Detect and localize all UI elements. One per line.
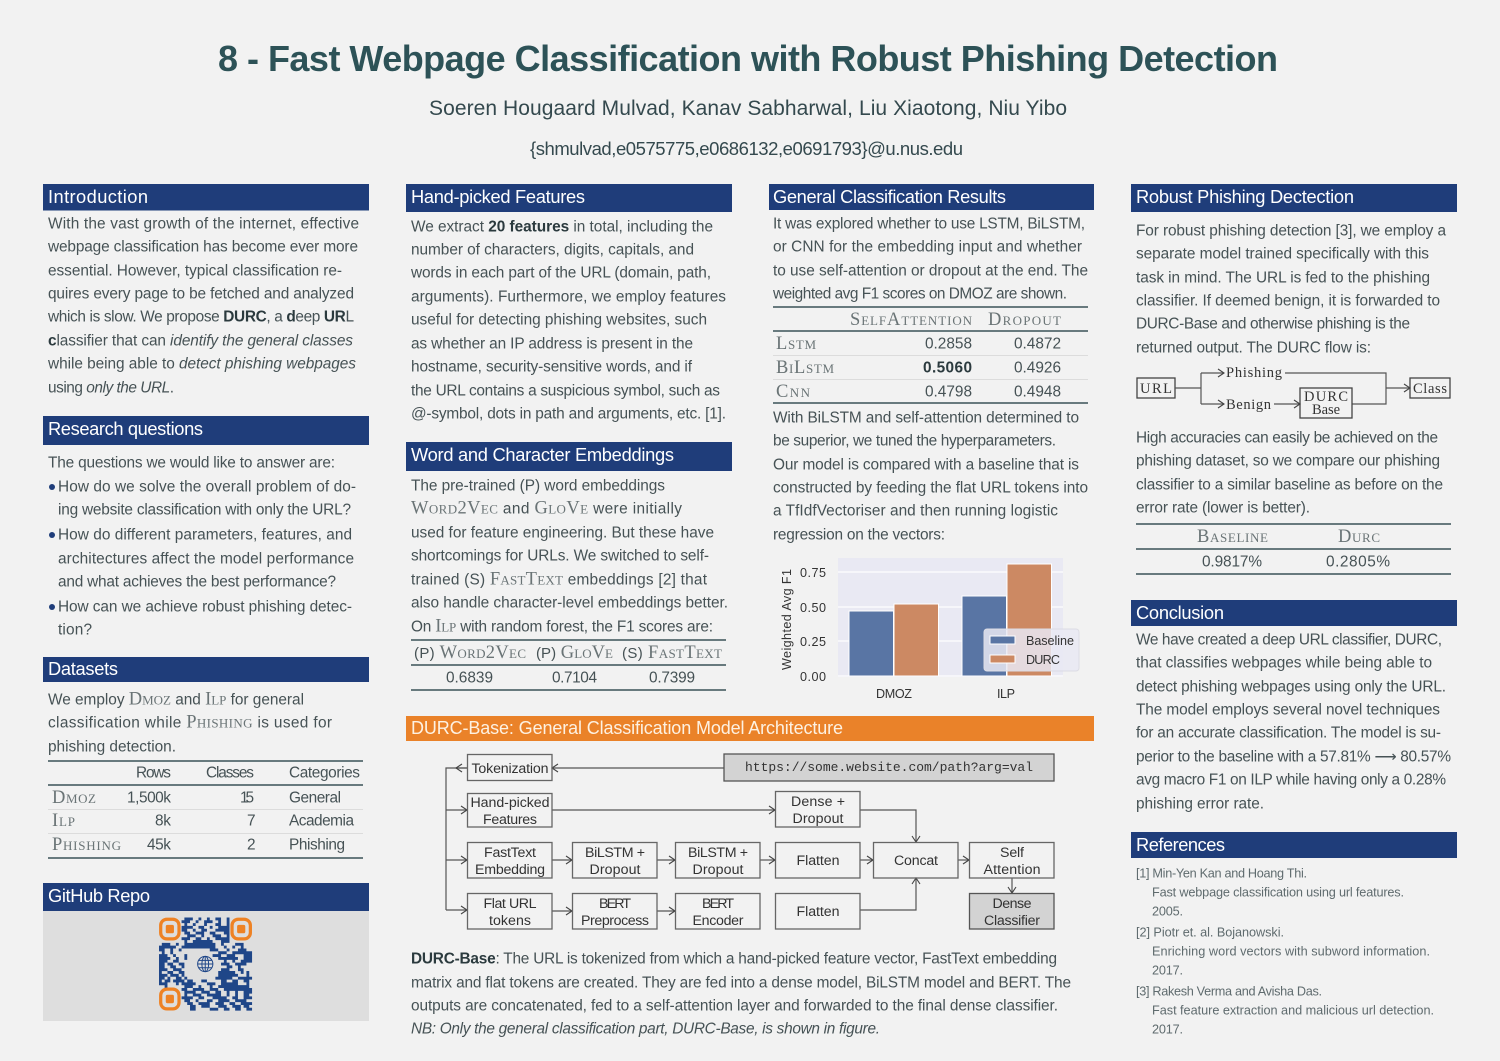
flow diagram: durc flow: Benign xyxy=(1226,397,1272,413)
text: features body xyxy=(410,218,726,422)
text: results intro: It was explored whether to use LSTM, BiLSTM, xyxy=(773,215,1085,232)
node: flatten 1: Flatten xyxy=(796,853,840,869)
heading: hand-picked features: Hand-picked Features xyxy=(411,186,585,207)
node: concat: Concat xyxy=(894,853,938,869)
text: results intro xyxy=(772,215,1088,302)
text: research questions list: and what achieves the best performance? xyxy=(58,573,336,590)
text: introduction body: webpage classification has become ever more xyxy=(47,238,358,255)
heading: general classification results xyxy=(769,184,1094,210)
table: model comparison: 0.4948 xyxy=(1014,383,1061,400)
heading: robust phishing detection xyxy=(1131,184,1457,212)
table: model comparison: 0.5060 xyxy=(923,359,972,376)
text: features body: number of characters, digits, capitals, and xyxy=(411,241,694,258)
node: url input xyxy=(724,754,1054,781)
bar chart: weighted avg F1: DMOZ xyxy=(876,687,912,701)
text: embeddings body: On Ilp with random forest, the F1 scores are: xyxy=(411,616,713,636)
node: tokenization: Tokenization xyxy=(472,761,548,777)
panel: references xyxy=(1131,832,1457,1036)
table: datasets: 2 xyxy=(247,836,256,853)
heading: model architecture xyxy=(406,716,1094,741)
node: bert encoder xyxy=(676,894,760,929)
panel: hand-picked features xyxy=(406,184,732,422)
text: conclusion body: phishing error rate. xyxy=(1136,795,1264,812)
legend xyxy=(984,629,1079,671)
text: results intro: to use self-attention or dropout at the end. The xyxy=(773,262,1088,279)
node: flat url tokens xyxy=(468,894,552,929)
text: conclusion body xyxy=(1136,631,1451,812)
node: hand-picked features: Features xyxy=(483,812,537,828)
bar chart: weighted avg F1: 0.25 xyxy=(800,635,826,649)
node: fasttext embedding: Embedding xyxy=(475,862,545,878)
heading: conclusion xyxy=(1131,600,1457,626)
bar chart: weighted avg F1: 0.75 xyxy=(800,566,826,580)
table: embedding F1 scores: (P) GloVe xyxy=(536,643,613,663)
node: bilstm 2: BiLSTM + xyxy=(688,845,748,861)
text: research questions list: How do we solve the overall problem of do- xyxy=(58,478,356,495)
text: features body: the URL contains a suspicious symbol, such as xyxy=(411,382,720,399)
heading: datasets xyxy=(43,657,369,682)
text: embeddings body: The pre-trained (P) word embeddings xyxy=(411,477,665,494)
table: model comparison: 0.2858 xyxy=(925,335,972,352)
text: introduction body: which is slow. We propose DURC, a deep URL xyxy=(47,308,354,325)
table: embedding F1 scores: 0.6839 xyxy=(446,669,493,686)
panel: general classification results xyxy=(769,184,1094,701)
text: research questions list: The questions we would like to answer are: xyxy=(48,454,335,471)
panel: github repo xyxy=(43,883,369,1021)
text: conclusion body: perior to the baseline with a 57.81% ⟶ 80.57% xyxy=(1136,748,1451,765)
text: research questions list: How do different parameters, features, and xyxy=(58,526,352,543)
node: dense classifier: Dense xyxy=(992,896,1032,912)
text: features body: useful for detecting phishing websites, such xyxy=(411,311,707,328)
bar chart: weighted avg F1: Weighted Avg F1 xyxy=(780,569,794,670)
node: dense dropout: Dense + xyxy=(791,794,845,810)
text: results baseline: With BiLSTM and self-attention determined to xyxy=(773,409,1079,426)
table: datasets xyxy=(48,761,363,858)
emails: {shmulvad,e0575775,e0686132,e0691793}@u.nus.edu xyxy=(530,138,963,159)
text: results intro: or CNN for the embedding input and whether xyxy=(773,238,1082,255)
table: datasets: Dmoz xyxy=(52,788,96,808)
panel: word and character embeddings xyxy=(406,442,732,690)
text: reference list xyxy=(1136,866,1434,1036)
heading: references: References xyxy=(1136,834,1225,855)
panel: datasets xyxy=(43,657,369,858)
text: phishing intro: task in mind. The URL is fed to the phishing xyxy=(1136,269,1430,286)
node: flatten 1 xyxy=(776,842,860,878)
text: introduction body: using only the URL. xyxy=(48,379,174,396)
legend: Baseline xyxy=(1026,634,1074,648)
panel: model architecture xyxy=(406,716,1094,1037)
table: datasets: 7 xyxy=(247,812,256,829)
panel: research questions xyxy=(43,416,369,638)
heading: references xyxy=(1131,832,1457,858)
text: results baseline: constructed by feeding the flat URL tokens into xyxy=(773,479,1088,496)
text: phishing results: error rate (lower is better). xyxy=(1136,499,1310,516)
heading: github repo: GitHub Repo xyxy=(48,885,150,906)
text: features body: as whether an IP address is present in the xyxy=(411,335,693,352)
text: architecture caption: outputs are concatenated, fed to a self-attention layer and forwarded to the final dense classifier. xyxy=(411,997,1058,1014)
text: phishing results: phishing dataset, so we compare our phishing xyxy=(1136,452,1440,469)
text: features body: arguments). Furthermore, we employ features xyxy=(411,288,726,305)
text: embeddings body: Word2Vec and GloVe were initially xyxy=(411,498,682,518)
node: bilstm 2 xyxy=(676,842,760,878)
table: datasets: Rows xyxy=(136,764,171,781)
node: bert preprocess xyxy=(572,894,657,929)
bar chart: weighted avg F1: 0.00 xyxy=(800,670,826,684)
table: embedding F1 scores: (S) FastText xyxy=(622,643,722,663)
table: datasets: 15 xyxy=(240,789,254,806)
node: bert encoder: BERT xyxy=(702,896,734,912)
text: results baseline: be superior, we tuned the hyperparameters. xyxy=(773,432,1056,449)
table: model comparison: Lstm xyxy=(776,334,816,354)
bar chart: weighted avg F1 xyxy=(780,558,1079,701)
text: conclusion body: for an accurate classification. The model is su- xyxy=(1136,724,1441,741)
text: conclusion body: We have created a deep URL classifier, DURC, xyxy=(1136,631,1442,648)
text: architecture caption: NB: Only the general classification part, DURC-Base, is shown in figure. xyxy=(411,1020,880,1037)
table: datasets: Categories xyxy=(289,764,360,781)
table: model comparison: 0.4926 xyxy=(1014,359,1061,376)
text: features body: @-symbol, dots in path and arguments, etc. [1]. xyxy=(411,405,726,422)
text: architecture caption: matrix and flat tokens are created. They are fed into a dense model, BiLSTM model and BERT. The xyxy=(411,974,1071,991)
legend: DURC xyxy=(1026,653,1060,667)
heading: introduction xyxy=(43,184,369,210)
text: datasets body xyxy=(48,689,332,755)
panel: robust phishing detection xyxy=(1131,184,1457,574)
text: introduction body: while being able to detect phishing webpages xyxy=(47,355,356,372)
text: reference list: Fast webpage classification using url features. xyxy=(1152,886,1404,900)
text: results baseline: a TfIdfVectoriser and then running logistic xyxy=(773,502,1058,519)
panel background: qr xyxy=(43,911,369,1021)
node: dense classifier: Classifier xyxy=(984,913,1040,929)
heading: robust phishing detection: Robust Phishing Dectection xyxy=(1136,186,1354,207)
text: introduction body: essential. However, typical classification re- xyxy=(48,262,342,279)
table: datasets: 45k xyxy=(147,836,171,853)
node: bilstm 1: Dropout xyxy=(590,862,641,878)
flow diagram: durc flow xyxy=(1137,365,1450,418)
text: reference list: [3] Rakesh Verma and Avisha Das. xyxy=(1136,984,1322,998)
text: research questions list: ing website classification with only the URL? xyxy=(58,501,351,518)
table: model comparison: 0.4798 xyxy=(925,383,972,400)
table: phishing error xyxy=(1136,524,1451,574)
text: reference list: Enriching word vectors with subword information. xyxy=(1152,944,1430,958)
table: datasets: Phishing xyxy=(52,835,121,855)
text: embeddings body: trained (S) FastText embeddings [2] that xyxy=(411,569,708,589)
table: model comparison: 0.4872 xyxy=(1014,335,1061,352)
table: datasets: Phishing xyxy=(289,836,345,853)
node: fasttext embedding xyxy=(468,842,552,878)
heading: research questions: Research questions xyxy=(48,418,203,439)
table: phishing error: 0.2805% xyxy=(1326,553,1390,570)
table: datasets: 1,500k xyxy=(127,789,171,806)
text: results baseline: Our model is compared with a baseline that is xyxy=(773,456,1079,473)
text: embeddings body: also handle character-level embeddings better. xyxy=(411,594,728,611)
text: research questions list: tion? xyxy=(58,621,92,638)
flow diagram: durc flow: Base xyxy=(1312,402,1340,418)
text: reference list: 2017. xyxy=(1152,964,1183,978)
bar chart: weighted avg F1: ILP xyxy=(997,687,1015,701)
text: datasets body: We employ Dmoz and Ilp for general xyxy=(48,689,304,709)
text: datasets body: phishing detection. xyxy=(48,738,176,755)
node: self attention: Self xyxy=(1000,845,1024,861)
table: model comparison: SelfAttention xyxy=(850,310,973,330)
text: results baseline xyxy=(773,409,1088,543)
heading: conclusion: Conclusion xyxy=(1136,602,1224,623)
flow diagram: durc flow: Class xyxy=(1413,381,1447,397)
text: research questions list: How can we achieve robust phishing detec- xyxy=(58,598,352,615)
text: phishing intro: DURC-Base and otherwise phishing is the xyxy=(1136,315,1410,332)
node: bert preprocess: Preprocess xyxy=(581,913,649,929)
table: embedding F1 scores: 0.7104 xyxy=(552,669,597,686)
text: results intro: weighted avg F1 scores on DMOZ are shown. xyxy=(772,285,1067,302)
heading: model architecture: DURC-Base: General Classification Model Architecture xyxy=(411,718,843,738)
text: reference list: 2017. xyxy=(1152,1022,1183,1036)
icon: qr code xyxy=(159,919,252,1009)
text: conclusion body: The model employs several novel techniques xyxy=(1136,701,1440,718)
node: tokenization xyxy=(468,754,552,780)
text: conclusion body: avg macro F1 on ILP while having only a 0.28% xyxy=(1136,771,1446,788)
text: architecture caption xyxy=(411,950,1071,1037)
authors: Soeren Hougaard Mulvad, Kanav Sabharwal, Liu Xiaotong, Niu Yibo xyxy=(429,97,1067,120)
panel: introduction xyxy=(43,184,369,396)
flow diagram: durc flow: URL xyxy=(1140,381,1172,397)
text: phishing results: High accuracies can easily be achieved on the xyxy=(1136,429,1438,446)
text: phishing intro: returned output. The DURC flow is: xyxy=(1136,339,1371,356)
table: phishing error: 0.9817% xyxy=(1202,553,1262,570)
node: dense dropout: Dropout xyxy=(792,811,844,827)
node: dense dropout xyxy=(776,792,860,827)
node: bert encoder: Encoder xyxy=(692,913,744,929)
text: phishing intro: classifier. If deemed benign, it is forwarded to xyxy=(1136,292,1440,309)
text: embeddings body xyxy=(411,477,728,636)
node: flatten 2 xyxy=(776,894,860,929)
flow diagram: durc flow: DURC xyxy=(1304,389,1348,405)
text: introduction body: With the vast growth of the internet, effective xyxy=(48,215,359,232)
flow diagram: durc flow: Phishing xyxy=(1226,365,1282,381)
text: features body: words in each part of the URL (domain, path, xyxy=(410,264,711,281)
title: 8 - Fast Webpage Classification with Robust Phishing Detection xyxy=(218,38,1278,79)
node: hand-picked features xyxy=(468,794,552,828)
table: embedding F1 scores: 0.7399 xyxy=(649,669,695,686)
heading: datasets: Datasets xyxy=(48,658,118,679)
text: research questions list xyxy=(48,454,356,638)
text: features body: hostname, security-sensitive words, and if xyxy=(411,358,693,375)
node: url input: https://some.website.com/path?arg=val xyxy=(745,760,1033,775)
node: fasttext embedding: FastText xyxy=(484,845,536,861)
table: datasets: Ilp xyxy=(52,811,75,831)
text: architecture caption: DURC-Base: The URL is tokenized from which a hand-picked feature vector, FastText embedding xyxy=(411,950,1057,967)
heading: hand-picked features xyxy=(406,184,732,212)
text: conclusion body: detect phishing webpages using only the URL. xyxy=(1136,678,1446,695)
node: bilstm 1 xyxy=(572,842,657,878)
heading: embeddings: Word and Character Embeddings xyxy=(411,444,674,465)
heading: introduction: Introduction xyxy=(48,186,148,207)
table: datasets: General xyxy=(289,789,341,806)
node: flatten 2: Flatten xyxy=(796,904,840,920)
text: reference list: Fast feature extraction and malicious url detection. xyxy=(1152,1004,1434,1018)
table: datasets: 8k xyxy=(155,812,171,829)
text: introduction body: quires every page to be fetched and analyzed xyxy=(48,285,354,302)
text: results baseline: regression on the vectors: xyxy=(773,526,945,543)
node: bilstm 1: BiLSTM + xyxy=(585,845,645,861)
text: conclusion body: that classifies webpages while being able to xyxy=(1136,654,1432,671)
node: flat url tokens: tokens xyxy=(489,913,531,929)
text: phishing intro: separate model trained specifically with this xyxy=(1136,245,1429,262)
node: self attention: Attention xyxy=(984,862,1040,878)
heading: embeddings xyxy=(406,442,732,471)
text: phishing results: classifier to a similar baseline as before on the xyxy=(1136,476,1443,493)
table: model comparison: Cnn xyxy=(776,382,811,402)
text: introduction body xyxy=(47,215,359,396)
heading: research questions xyxy=(43,416,369,445)
bar chart: weighted avg F1: 0.50 xyxy=(800,601,826,615)
panel: conclusion xyxy=(1131,600,1457,812)
text: reference list: [1] Min-Yen Kan and Hoang Thi. xyxy=(1136,866,1307,880)
text: features body: We extract 20 features in total, including the xyxy=(411,218,713,235)
text: research questions list: architectures affect the model performance xyxy=(58,550,354,567)
node: bilstm 2: Dropout xyxy=(692,862,744,878)
text: embeddings body: used for feature engineering. But these have xyxy=(411,524,714,541)
table: embedding F1 scores: (P) Word2Vec xyxy=(414,643,526,663)
table: datasets: Classes xyxy=(206,764,254,781)
text: phishing results xyxy=(1136,429,1443,516)
table: embedding F1 scores xyxy=(411,640,726,690)
heading: general classification results: General Classification Results xyxy=(773,186,1006,207)
connectors xyxy=(446,768,1012,911)
table: model comparison: Dropout xyxy=(988,310,1061,330)
table: datasets: Academia xyxy=(289,812,354,829)
diagram: model architecture xyxy=(446,754,1054,929)
node: concat xyxy=(874,842,958,878)
text: reference list: 2005. xyxy=(1152,904,1183,918)
node: hand-picked features: Hand-picked xyxy=(470,795,550,811)
table: model comparison: BiLstm xyxy=(776,358,834,378)
text: phishing intro: For robust phishing detection [3], we employ a xyxy=(1136,222,1446,239)
node: bert preprocess: BERT xyxy=(599,896,631,912)
table: model comparison xyxy=(773,307,1088,403)
table: phishing error: Durc xyxy=(1338,527,1380,547)
text: reference list: [2] Piotr et. al. Bojanowski. xyxy=(1136,926,1284,940)
node: flat url tokens: Flat URL xyxy=(484,896,537,912)
text: introduction body: classifier that can identify the general classes xyxy=(48,332,353,349)
text: datasets body: classification while Phishing is used for xyxy=(48,712,332,732)
heading: github repo xyxy=(43,883,369,911)
text: phishing intro xyxy=(1136,222,1446,356)
table: phishing error: Baseline xyxy=(1197,527,1268,547)
node: self attention xyxy=(970,842,1054,878)
node: dense classifier xyxy=(970,894,1054,929)
text: embeddings body: shortcomings for URLs. We switched to self- xyxy=(411,547,709,564)
